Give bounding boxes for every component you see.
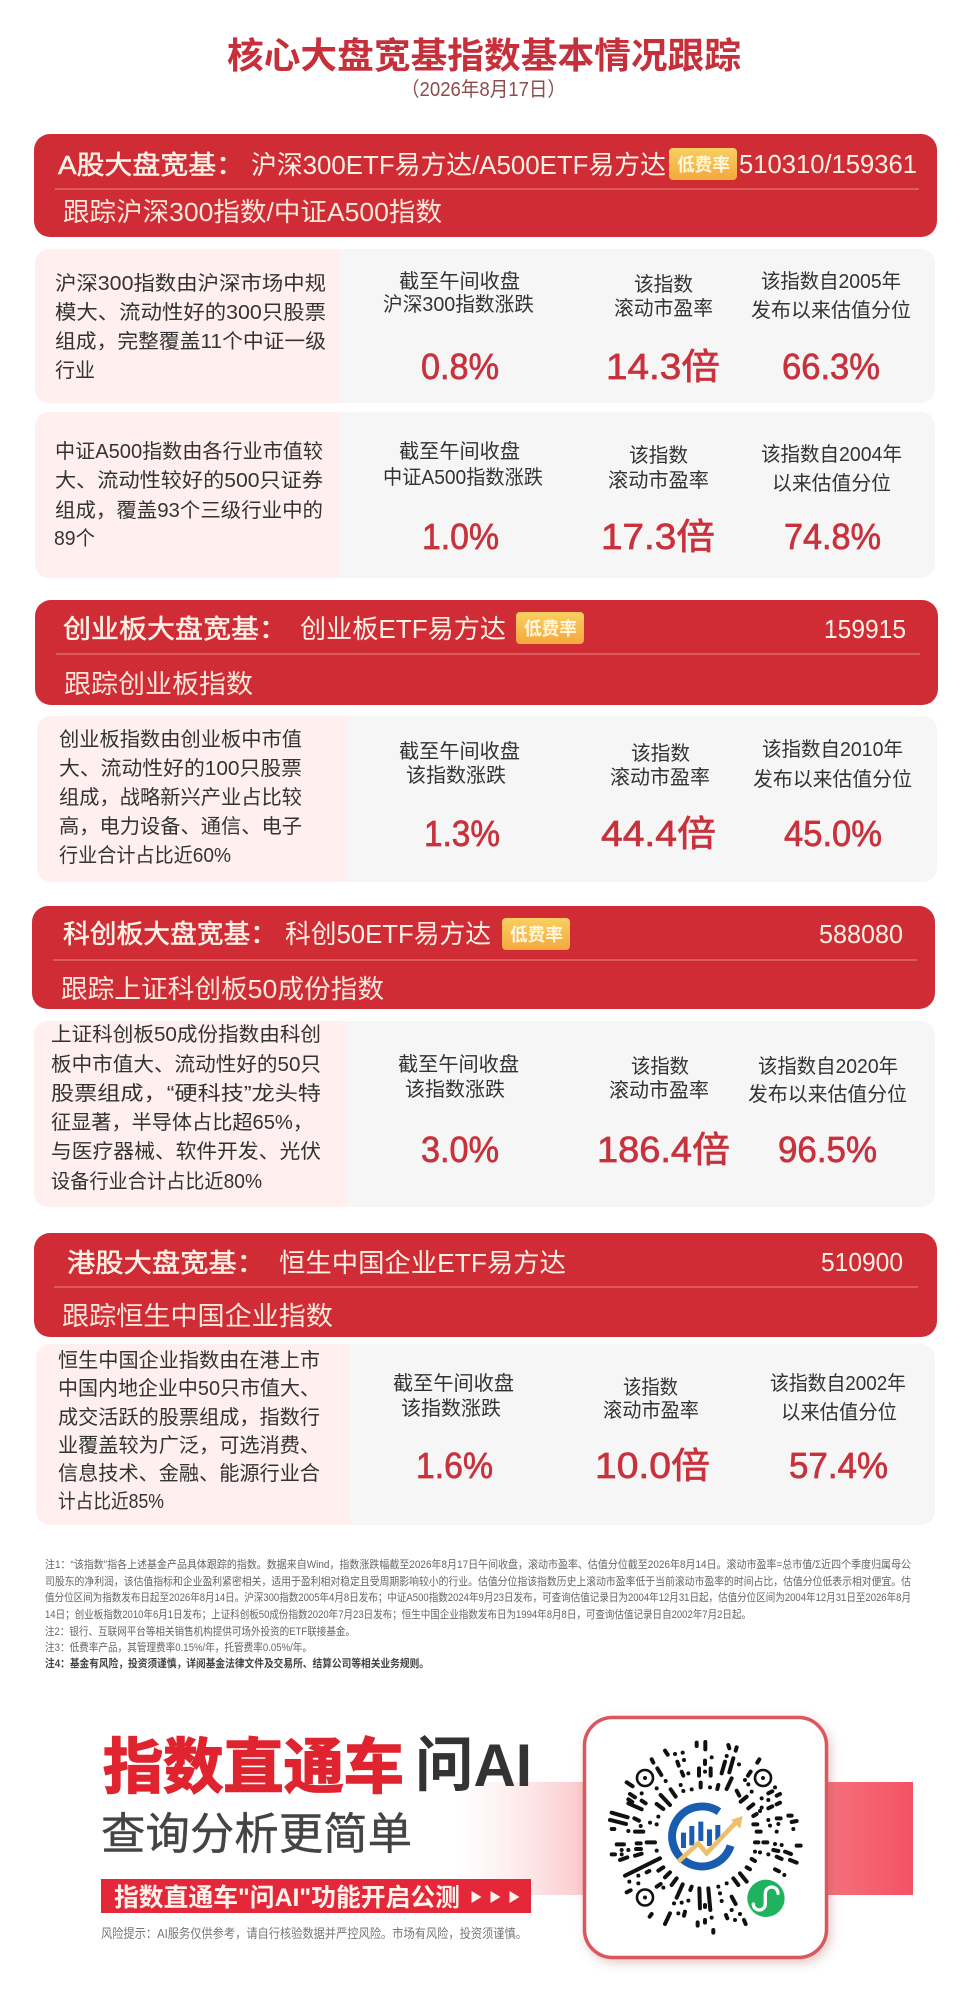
panel header: 港股大盘宽基: 恒生中国企业ETF易方达	[279, 1248, 566, 1278]
description text: 设备行业合计占比近80%	[51, 1170, 262, 1193]
metric: 估值分位: 57.4%	[789, 1445, 888, 1486]
metric: 滚动市盈率	[595, 1376, 710, 1486]
metric: 涨跌: 3.0%	[421, 1129, 499, 1170]
panel header: A股大盘宽基	[34, 134, 937, 237]
metric: 滚动市盈率: 滚动市盈率	[610, 766, 710, 789]
panel: 创业板指数	[37, 716, 937, 882]
description text: 恒生中国企业指数由在港上市	[58, 1349, 320, 1372]
metric: 涨跌: 该指数涨跌	[405, 1078, 505, 1101]
metric: 滚动市盈率	[601, 742, 716, 854]
badge: 低费率	[502, 918, 570, 950]
metric: 估值分位: 66.3%	[782, 346, 880, 387]
metric: 涨跌: 1.6%	[416, 1445, 493, 1486]
metric: 估值分位: 该指数自2005年	[761, 270, 901, 293]
panel header: 创业板大盘宽基: 跟踪创业板指数	[64, 669, 253, 699]
metric: 滚动市盈率: 滚动市盈率	[614, 297, 713, 320]
metric: 涨跌: 1.0%	[422, 516, 499, 557]
QR code card	[584, 1718, 826, 1958]
metric: 涨跌: 该指数涨跌	[401, 1397, 501, 1420]
metric: 涨跌: 截至午间收盘	[399, 270, 520, 293]
metric: 滚动市盈率: 44.4倍	[601, 813, 716, 854]
metric: 估值分位	[770, 1372, 906, 1486]
panel header: 港股大盘宽基: 跟踪恒生中国企业指数	[62, 1301, 333, 1331]
metric: 估值分位: 该指数自2002年	[770, 1372, 906, 1395]
panel header: A股大盘宽基: A股大盘宽基：	[58, 150, 244, 180]
metric: 涨跌	[393, 1372, 514, 1486]
metric: 涨跌: 截至午间收盘	[399, 740, 520, 763]
description text: 成交活跃的股票组成，指数行	[58, 1406, 320, 1429]
description text: 组成，完整覆盖11个中证一级	[55, 330, 326, 353]
metric: 滚动市盈率: 10.0倍	[595, 1445, 710, 1486]
description text: 上证科创板50成份指数由科创	[51, 1023, 321, 1046]
icon: chart logo	[672, 1806, 743, 1866]
description text: 征显著，半导体占比超65%，	[51, 1111, 313, 1134]
metric: 估值分位: 45.0%	[784, 813, 882, 854]
description text	[58, 1349, 320, 1513]
metric: 滚动市盈率: 该指数	[623, 1376, 678, 1399]
description text: 模大、流动性好的300只股票	[55, 301, 326, 324]
metric: 滚动市盈率: 该指数	[634, 273, 693, 296]
metric: 涨跌: 0.8%	[421, 346, 499, 387]
panel header: A股大盘宽基: 沪深300ETF易方达/A500ETF易方达	[251, 150, 666, 180]
footnotes: 注3：低费率产品，其管理费率0.15%/年，托管费率0.05%/年。	[45, 1640, 312, 1654]
promo heading: 指数直通车	[103, 1734, 404, 1801]
description text: 与医疗器械、软件开发、光伏	[51, 1140, 321, 1163]
description text: 中证A500指数由各行业市值较	[55, 440, 323, 463]
badge: 低费率	[516, 612, 584, 644]
metric: 涨跌: 截至午间收盘	[393, 1372, 514, 1395]
description text	[54, 440, 323, 550]
metric: 估值分位	[748, 1055, 907, 1170]
metric: 涨跌	[398, 1053, 519, 1170]
metric: 涨跌	[383, 270, 534, 387]
metric: 涨跌: 该指数涨跌	[406, 764, 506, 787]
panel header: 科创板大盘宽基: 588080	[819, 919, 903, 949]
panel header: A股大盘宽基: 510310/159361	[739, 149, 917, 179]
metric: 估值分位	[761, 443, 902, 557]
metric: 估值分位: 以来估值分位	[781, 1401, 897, 1424]
metric: 滚动市盈率: 滚动市盈率	[603, 1399, 699, 1422]
metric: 估值分位: 该指数自2010年	[762, 738, 903, 761]
metric: 滚动市盈率: 17.3倍	[601, 516, 715, 557]
description text: 大、流动性较好的500只证券	[55, 469, 323, 492]
metric: 估值分位: 96.5%	[778, 1129, 877, 1170]
promo call-to-action bar	[101, 1879, 531, 1913]
description text: 股票组成，“硬科技”龙头特	[51, 1082, 321, 1105]
QR finder marks	[637, 1770, 771, 1906]
metric: 估值分位: 以来估值分位	[772, 472, 891, 495]
metric: 涨跌	[383, 440, 543, 557]
metric: 估值分位: 该指数自2004年	[761, 443, 902, 466]
metric: 滚动市盈率: 该指数	[631, 1055, 689, 1078]
QR modules	[610, 1742, 801, 1933]
panel: 中证A500指数	[35, 412, 935, 578]
description text: 组成，覆盖93个三级行业中的	[55, 499, 323, 522]
promo subheading: 查询分析更简单	[101, 1810, 412, 1859]
metric: 涨跌: 1.3%	[424, 813, 500, 854]
footnotes: 14日；创业板指数2010年6月1日发布；上证科创板50成份指数2020年7月23日发布；恒生中国企业指数发布日为1994年8月8日，可查询估值记录日自2002年7月2日起。	[45, 1607, 751, 1621]
metric: 涨跌	[399, 740, 520, 854]
metric: 滚动市盈率: 186.4倍	[597, 1129, 730, 1170]
promo call-to-action bar: 指数直通车"问AI"功能开启公测	[114, 1884, 460, 1912]
metric: 估值分位: 发布以来估值分位	[748, 1083, 907, 1106]
metric: 滚动市盈率: 滚动市盈率	[609, 1079, 709, 1102]
description text: 89个	[54, 527, 95, 550]
badge: 低费率	[669, 148, 737, 180]
description text: 高，电力设备、通信、电子	[59, 815, 302, 838]
description text: 大、流动性好的100只股票	[59, 757, 302, 780]
metric: 滚动市盈率: 该指数	[629, 444, 688, 467]
panel header: 科创板大盘宽基	[32, 906, 935, 1009]
metric: 估值分位: 发布以来估值分位	[753, 768, 912, 791]
metric: 估值分位	[753, 738, 912, 854]
description text	[59, 728, 302, 867]
panel header: 科创板大盘宽基: 科创50ETF易方达	[285, 919, 491, 949]
panel header: 创业板大盘宽基: 创业板大盘宽基：	[63, 614, 287, 644]
badge: 低费率: 低费率	[524, 619, 577, 639]
panel header: 创业板大盘宽基: 创业板ETF易方达	[300, 614, 506, 644]
risk notice: 风险提示：AI服务仅供参考，请自行核验数据并严控风险。市场有风险，投资须谨慎。	[101, 1926, 527, 1941]
description text: 板中市值大、流动性好的50只	[51, 1053, 321, 1076]
panel: 沪深300指数	[35, 249, 935, 403]
title: 核心大盘宽基指数基本情况跟踪	[227, 35, 741, 76]
metric: 估值分位	[751, 270, 911, 387]
metric: 滚动市盈率: 14.3倍	[606, 346, 720, 387]
icon: triple arrows	[472, 1891, 520, 1903]
description text: 行业合计占比近60%	[59, 844, 231, 867]
metric: 涨跌: 沪深300指数涨跌	[383, 293, 534, 316]
panel: 上证科创板50成份指数	[34, 1021, 935, 1207]
description text: 中国内地企业中50只市值大、	[58, 1377, 320, 1400]
panel header: A股大盘宽基: 跟踪沪深300指数/中证A500指数	[63, 197, 442, 227]
badge: 低费率: 低费率	[677, 155, 730, 175]
description text	[51, 1023, 321, 1193]
panel header: 创业板大盘宽基: 159915	[824, 614, 906, 644]
panel: 恒生中国企业指数	[36, 1344, 935, 1525]
footnotes	[45, 1557, 911, 1670]
metric: 估值分位: 发布以来估值分位	[751, 299, 911, 322]
footnotes: 注2：银行、互联网平台等相关销售机构提供可场外投资的ETF联接基金。	[45, 1624, 355, 1638]
panel header: 科创板大盘宽基: 科创板大盘宽基：	[63, 919, 277, 949]
badge: 低费率: 低费率	[510, 925, 563, 945]
description text: 组成，战略新兴产业占比较	[59, 786, 302, 809]
metric: 估值分位: 该指数自2020年	[758, 1055, 898, 1078]
panel header: 港股大盘宽基	[34, 1233, 937, 1337]
panel header: 港股大盘宽基: 港股大盘宽基：	[67, 1248, 265, 1278]
description text	[55, 272, 326, 382]
description text: 信息技术、金融、能源行业合	[58, 1462, 320, 1485]
metric: 涨跌: 中证A500指数涨跌	[383, 466, 543, 489]
panel header: 港股大盘宽基: 510900	[821, 1247, 903, 1277]
metric: 滚动市盈率	[601, 444, 715, 557]
footnotes: 注4：基金有风险，投资须谨慎，详阅基金法律文件及交易所、结算公司等相关业务规则。	[45, 1656, 429, 1670]
date: （2026年8月17日）	[401, 78, 566, 101]
metric: 滚动市盈率	[597, 1055, 730, 1170]
title	[227, 35, 741, 101]
description text: 计占比近85%	[58, 1490, 164, 1513]
description text: 行业	[55, 359, 95, 382]
description text: 沪深300指数由沪深市场中规	[55, 272, 326, 295]
metric: 滚动市盈率	[606, 273, 720, 387]
description text: 创业板指数由创业板中市值	[59, 728, 302, 751]
icon: mini program badge	[747, 1880, 785, 1917]
promo heading	[101, 1732, 532, 1859]
metric: 涨跌: 截至午间收盘	[399, 440, 520, 463]
promo band	[457, 1782, 913, 1895]
description text: 业覆盖较为广泛，可选消费、	[58, 1434, 320, 1457]
metric: 滚动市盈率: 滚动市盈率	[608, 469, 709, 492]
metric: 滚动市盈率: 该指数	[631, 742, 690, 765]
metric: 估值分位: 74.8%	[784, 516, 881, 557]
panel header: 创业板大盘宽基	[35, 600, 938, 705]
panel header: 科创板大盘宽基: 跟踪上证科创板50成份指数	[61, 974, 384, 1004]
metric: 涨跌: 截至午间收盘	[398, 1053, 519, 1076]
promo heading: 问AI	[415, 1732, 532, 1799]
